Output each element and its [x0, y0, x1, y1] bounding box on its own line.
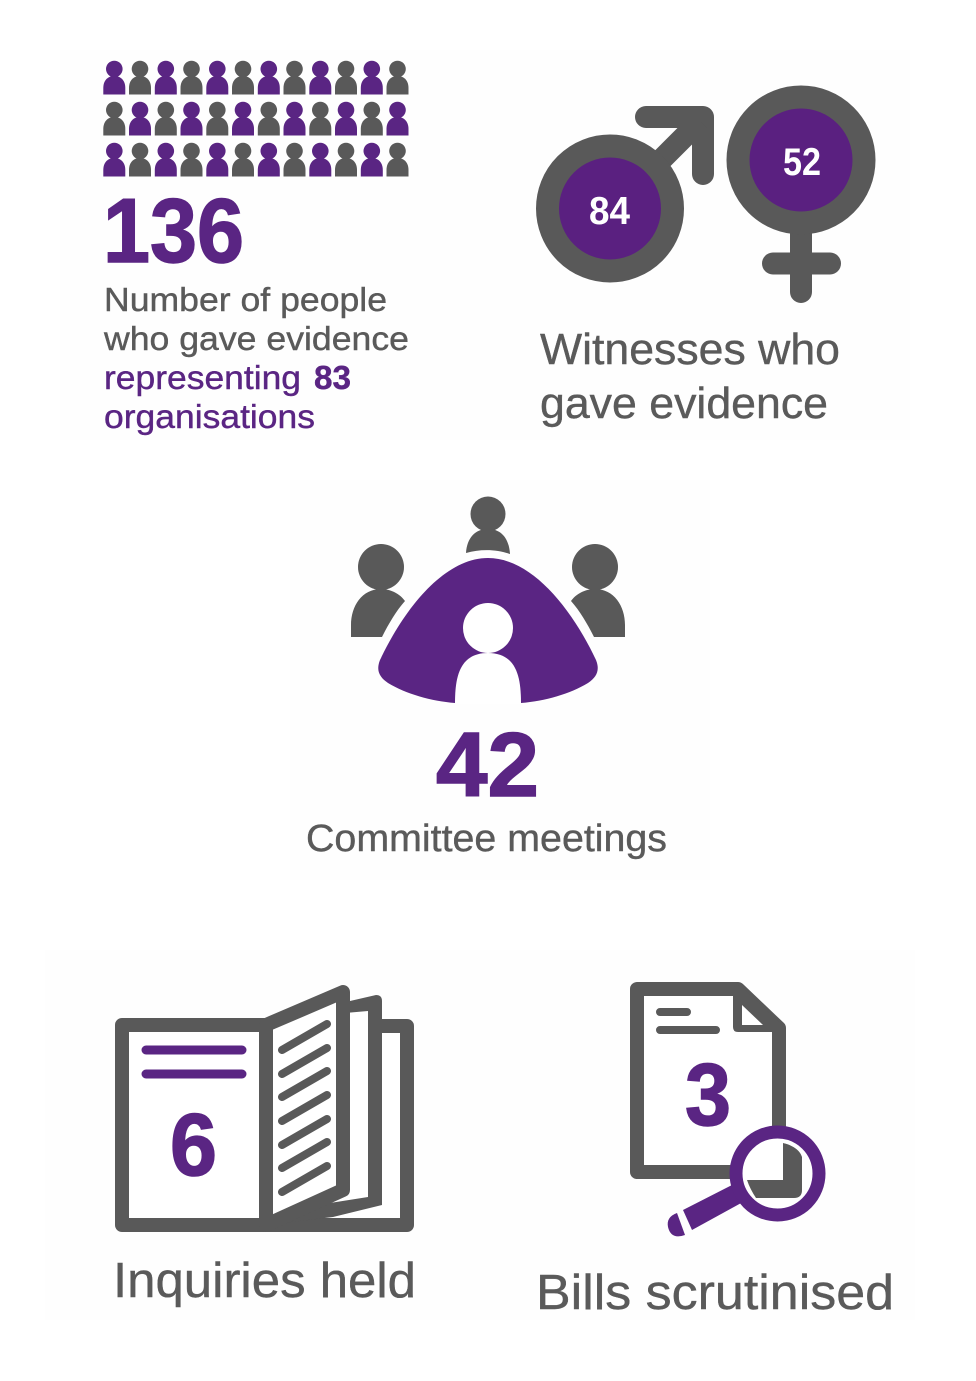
icon: document with magnifier and 3	[637, 985, 819, 1236]
text: bills label: Bills scrutinised	[536, 1266, 894, 1320]
text: inquiries label: Inquiries held	[113, 1254, 416, 1308]
number: 42: 42	[436, 715, 539, 816]
text: witnesses label	[540, 325, 840, 428]
panel: committee meetings	[306, 496, 667, 860]
icon: female symbol with 52	[738, 97, 864, 292]
panel: people who gave evidence	[103, 61, 409, 435]
text: committee meetings label: Committee meetings	[306, 818, 667, 860]
text: people description	[103, 281, 409, 435]
icon: open book with 6: 6	[170, 1095, 217, 1194]
icon: open book with 6	[122, 992, 407, 1225]
icon: female symbol with 52: 52	[783, 141, 821, 184]
text: people description: Number of people	[104, 281, 387, 318]
icon: male symbol with 84	[548, 117, 703, 271]
icon: people round a table	[351, 496, 625, 704]
text: people description: representing	[104, 359, 301, 396]
icon: document with magnifier and 3: 3	[685, 1045, 731, 1144]
icon: grid of people	[103, 61, 409, 177]
icon: male symbol with 84: 84	[589, 190, 630, 233]
text: people description: 83	[314, 359, 351, 396]
number: 136: 136	[103, 181, 244, 282]
panel: bills scrutinised	[536, 985, 894, 1320]
text: witnesses label: gave evidence	[540, 379, 828, 428]
text: people description: organisations	[104, 398, 315, 435]
panel: witnesses by gender	[540, 97, 864, 428]
panel: inquiries held	[113, 992, 416, 1308]
text: people description: who gave evidence	[103, 320, 409, 357]
text: witnesses label: Witnesses who	[540, 325, 840, 374]
